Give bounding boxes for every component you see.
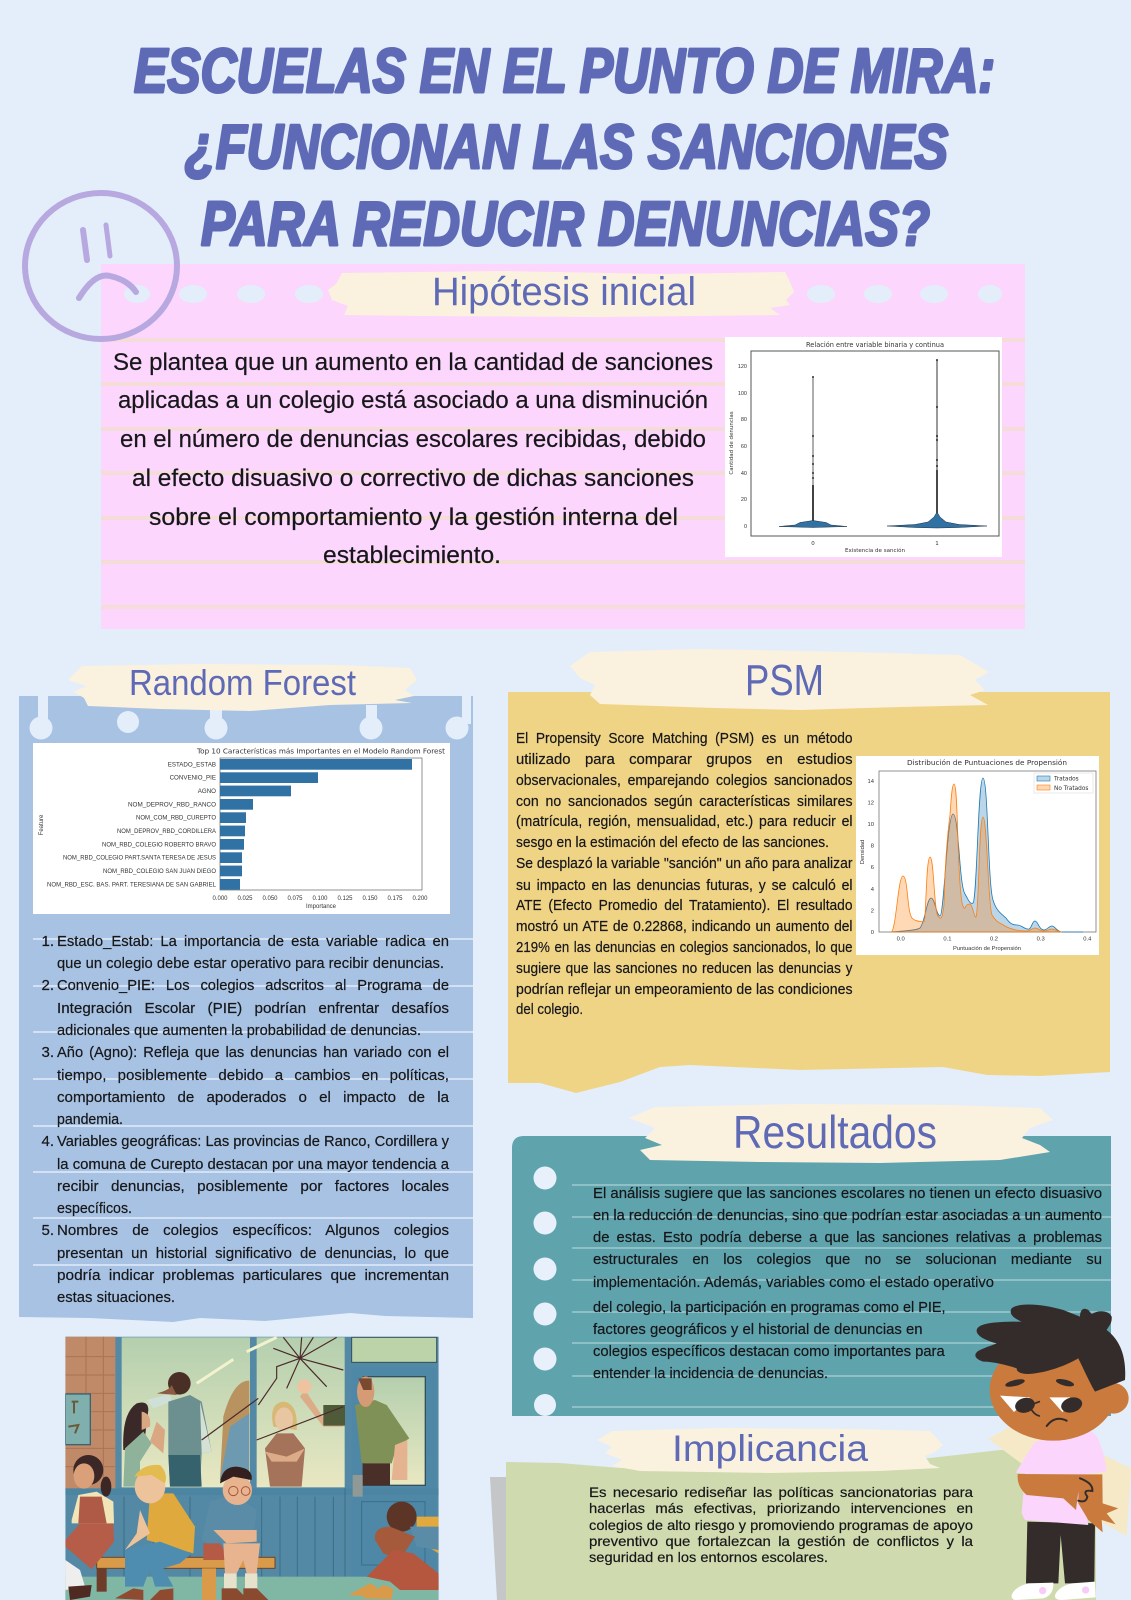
violin chart: Relación entre variable binaria y continua [806, 341, 944, 349]
numbered list: variables: Convenio_PIE: Los colegios adscritos al Programa de [57, 977, 449, 994]
violin chart: 120 [738, 364, 747, 370]
density chart: propensity: 0.2 [990, 936, 998, 942]
text block: PSM: El Propensity Score Matching (PSM) es un método [516, 731, 852, 747]
numbered list: variables: adicionales que aumenten la probabilidad de denuncias. [57, 1022, 421, 1039]
illustration: school scene [65, 1337, 439, 1600]
numbered list: variables: Estado_Estab: La importancia de esta variable radica en [57, 933, 449, 950]
text block: PSM: podrían reflejar un empeoramiento de las condiciones [516, 982, 852, 998]
title: ¿FUNCIONAN LAS SANCIONES [185, 113, 948, 182]
text block: implicancia: seguridad en los entornos escolares. [589, 1549, 828, 1565]
numbered list: variables: Integración Escolar (PIE) podrían enfrentar desafíos [57, 1000, 449, 1017]
cracks [202, 1337, 343, 1440]
text block: PSM: del colegio. [516, 1002, 583, 1018]
text block: implicancia: colegios de alto riesgo y promoviendo programas de apoyo [589, 1517, 973, 1533]
numbered list: variables: 1. [41, 933, 54, 950]
numbered list: variables: 3. [41, 1044, 54, 1061]
text block: resultados: estructurales en los colegios que no se solucionan mediante su [593, 1252, 1102, 1268]
text block: PSM: (matrícula, región, mensualidad, etc.) para reducir el [516, 814, 852, 830]
numbered list: variables: presentan un historial significativo de denuncias, lo que [57, 1245, 449, 1262]
bar chart: top 10 features: NOM_RBD_ESC. BAS. PART. TERESIANA DE SAN GABRIEL [47, 881, 217, 888]
title [134, 37, 995, 259]
text block: implicancia [589, 1484, 973, 1565]
heading: PSM [570, 649, 989, 710]
text block: resultados: El análisis sugiere que las sanciones escolares no tienen un efecto disuasivo [593, 1186, 1102, 1202]
density chart: propensity: Tratados [1053, 776, 1079, 782]
density chart: propensity: 10 [868, 822, 874, 828]
text block: implicancia: preventivo que fortalezcan la gestión de conflictos y la [589, 1533, 973, 1549]
bar chart: top 10 features: 0.050 [262, 896, 278, 902]
density chart: propensity: No Tratados [1054, 786, 1088, 792]
text block: resultados: implementación. Además, variables como el estado operativo [593, 1275, 994, 1291]
numbered list: variables: Variables geográficas: Las provincias de Ranco, Cordillera y [57, 1133, 449, 1150]
violin chart: Existencia de sanción [845, 547, 906, 554]
heading: resultados: Resultados [733, 1106, 937, 1158]
text block: hipótesis [113, 349, 713, 569]
bar chart: top 10 features: AGNO [198, 788, 216, 795]
density chart: propensity: 8 [871, 844, 874, 850]
density chart: propensity: 0.0 [897, 936, 905, 942]
heading: implicancia [597, 1428, 943, 1473]
text block: PSM: sesgo en la estimación del efecto de las sanciones. [516, 835, 829, 851]
violin chart: 100 [738, 391, 747, 397]
numbered list: variables: específicos. [57, 1200, 132, 1217]
numbered list: variables: que un colegio debe estar operativo para recibir denuncias. [57, 955, 444, 972]
violin chart [725, 337, 1002, 557]
bar chart: top 10 features: ESTADO_ESTAB [168, 761, 216, 768]
violin chart: 1 [935, 541, 939, 547]
text block: hipótesis: sobre el comportamiento y la gestión interna del [149, 504, 678, 531]
text block: hipótesis: aplicadas a un colegio está asociado a una disminución [118, 387, 708, 414]
text block: resultados: de estas. Esto podría deberse a que las sanciones relativas a problemas [593, 1230, 1102, 1246]
panel: resultados [512, 1104, 1111, 1416]
text block: PSM: observacionales, emparejando colegios sancionados [516, 773, 852, 789]
bar chart: top 10 features: NOM_RBD_COLEGIO SAN JUAN DIEGO [103, 868, 216, 875]
bar chart: top 10 features: 0.075 [287, 896, 303, 902]
bar chart: top 10 features: 0.100 [312, 896, 328, 902]
text block: resultados: del colegio, la participación en programas como el PIE, [593, 1300, 946, 1316]
text block: implicancia: Es necesario rediseñar las políticas sancionatorias para [589, 1484, 973, 1500]
text block: resultados: en la reducción de denuncias, sino que podrían estar asociadas a un aumento [593, 1208, 1102, 1224]
text block: resultados: entender la incidencia de denuncias. [593, 1366, 828, 1382]
text block: implicancia: hacerlas más efectivas, priorizando intervenciones en [589, 1500, 973, 1516]
density chart: propensity: 6 [871, 865, 874, 871]
bar chart: top 10 features: NOM_DEPROV_RBD_CORDILLERA [117, 828, 217, 835]
density chart: propensity: 0.3 [1037, 936, 1045, 942]
violin chart: 0 [811, 541, 815, 547]
bar chart: top 10 features: 0.175 [387, 896, 403, 902]
violin chart: Cantidad de denuncias [729, 411, 735, 475]
text block: PSM: mostró un ATE de 0.22868, indicando un aumento del [516, 919, 852, 935]
text block: PSM [516, 731, 853, 1018]
density chart: propensity: 0.1 [943, 936, 951, 942]
bar chart: top 10 features: NOM_DEPROV_RBD_RANCO [128, 801, 216, 808]
violin chart: 40 [741, 471, 747, 477]
numbered list: variables [41, 933, 450, 1306]
bar chart: top 10 features: NOM_RBD_COLEGIO PART.SANTA TERESA DE JESUS [63, 855, 216, 862]
bar chart: top 10 features: 0.000 [212, 896, 228, 902]
numbered list: variables: tiempo, posiblemente debido a cambios en políticas, [57, 1067, 449, 1084]
violin chart: 20 [741, 497, 747, 503]
bar chart: top 10 features: Feature [39, 814, 45, 835]
violin chart: 0 [744, 524, 747, 530]
heading: random forest: Random Forest [129, 662, 356, 703]
numbered list: variables: recibir denuncias, posiblemente por factores locales [57, 1178, 449, 1195]
violin chart: 80 [741, 417, 747, 423]
heading: implicancia: Implicancia [672, 1428, 868, 1469]
panel: PSM [508, 649, 1110, 1093]
density chart: propensity: 12 [868, 800, 874, 806]
density chart: propensity: Distribución de Puntuaciones de Propensión [907, 758, 1067, 767]
density chart: propensity: 0 [871, 930, 874, 936]
density chart: propensity [856, 756, 1099, 955]
numbered list: variables: 2. [41, 977, 54, 994]
numbered list: variables: podría indicar problemas particulares que incrementan [57, 1267, 449, 1284]
density chart: propensity: 4 [871, 887, 875, 893]
numbered list: variables: la comuna de Curepto destacan por una mayor tendencia a [57, 1156, 450, 1173]
numbered list: variables: 4. [41, 1133, 54, 1150]
bar chart: top 10 features: 0.125 [337, 896, 353, 902]
bar chart: top 10 features: 0.150 [362, 896, 378, 902]
density chart: propensity: 0.4 [1083, 936, 1092, 942]
text block: hipótesis: Se plantea que un aumento en la cantidad de sanciones [113, 349, 713, 376]
text block: PSM: sugiere que las sanciones no reducen las denuncias y [516, 961, 853, 977]
icon: sad face [25, 193, 177, 339]
heading: resultados [629, 1104, 1053, 1163]
heading: random forest [68, 662, 417, 711]
text block: PSM: 219% en las denuncias en colegios sancionados, lo que [516, 940, 852, 956]
text block: PSM: con no sancionados según características similares [516, 794, 852, 810]
window figures [147, 1394, 172, 1408]
illustration: sad boy [975, 1305, 1131, 1600]
bar chart: top 10 features [33, 743, 450, 914]
heading: PSM: PSM [745, 656, 824, 705]
numbered list: variables: pandemia. [57, 1111, 123, 1128]
numbered list: variables: comportamiento de apoderados o el impacto de la [57, 1089, 450, 1106]
text block: PSM: ATE (Efecto Promedio del Tratamiento). El resultado [516, 898, 852, 914]
panel: implicancia [490, 1428, 1096, 1600]
numbered list: variables: 5. [41, 1222, 54, 1239]
violin chart: 60 [741, 444, 747, 450]
density chart: propensity: 14 [868, 779, 875, 785]
bar chart: top 10 features: 0.025 [237, 896, 253, 902]
bar chart: top 10 features: NOM_RBD_COLEGIO ROBERTO BRAVO [102, 841, 216, 848]
heading: hipótesis inicial: Hipótesis inicial [432, 270, 696, 314]
text block: hipótesis: al efecto disuasivo o correctivo de dichas sanciones [132, 465, 694, 492]
numbered list: variables: Nombres de colegios específicos: Algunos colegios [57, 1222, 449, 1239]
text block: resultados: factores geográficos y el historial de denuncias en [593, 1322, 922, 1338]
text block: resultados [593, 1186, 1102, 1382]
panel: random forest [19, 662, 473, 1322]
text block: hipótesis: establecimiento. [323, 542, 501, 569]
bar chart: top 10 features: 0.200 [412, 896, 428, 902]
bar chart: top 10 features: CONVENIO_PIE [170, 775, 216, 782]
panel: hipótesis inicial [101, 264, 1025, 629]
heading: hipótesis inicial [328, 270, 794, 317]
bar chart: top 10 features: Top 10 Características más Importantes en el Modelo Random Forest [196, 746, 445, 756]
bar chart: top 10 features: Importance [306, 904, 337, 910]
text block: PSM: Se desplazó la variable "sanción" un año para analizar [516, 856, 853, 872]
text block: resultados: colegios específicos destacan como importantes para [593, 1344, 946, 1360]
seated children [97, 1557, 275, 1568]
density chart: propensity: 2 [871, 908, 874, 914]
text block: hipótesis: en el número de denuncias escolares recibidas, debido [120, 426, 706, 453]
density chart: propensity: Puntuación de Propensión [953, 946, 1021, 952]
numbered list: variables: estas situaciones. [57, 1289, 175, 1306]
numbered list: variables: Año (Agno): Refleja que las denuncias han variado con el [57, 1044, 449, 1061]
title: PARA REDUCIR DENUNCIAS? [201, 190, 930, 259]
bar chart: top 10 features: NOM_COM_RBD_CUREPTO [136, 815, 216, 822]
text block: PSM: su impacto en las denuncias futuras, y se calculó el [516, 878, 852, 894]
text block: PSM: utilizado para comparar grupos en estudios [516, 752, 852, 768]
density chart: propensity: Densidad [860, 840, 866, 864]
